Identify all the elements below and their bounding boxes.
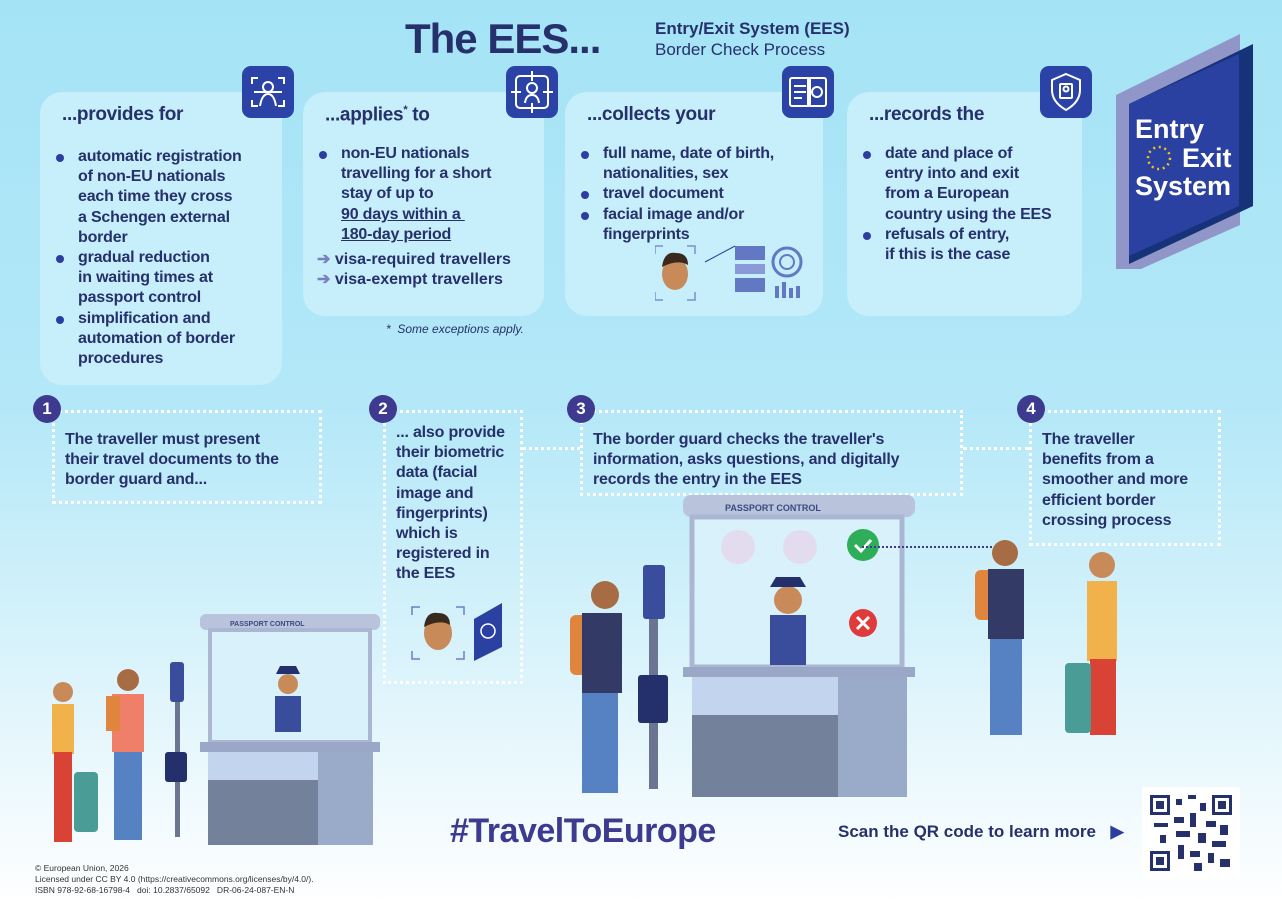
title: The EES... — [405, 15, 600, 62]
step 2: which is — [396, 525, 458, 542]
panel: collects your — [565, 92, 823, 316]
panel: records the: entry into and exit — [885, 165, 1019, 182]
step 1: their travel documents to the — [65, 451, 279, 468]
panel: provides for: gradual reduction — [78, 249, 210, 266]
icon: shield — [1040, 66, 1092, 118]
panel: collects your: full name, date of birth, — [603, 145, 774, 162]
illustration: face and data — [655, 245, 802, 301]
logo: Entry Exit System: Exit — [1182, 143, 1232, 173]
dotted connector to step 4 — [862, 546, 992, 548]
step 3 — [580, 410, 963, 496]
panel: provides for: simplification and — [78, 310, 210, 327]
panel: applies to: stay of up to — [341, 185, 434, 202]
panel: applies to: travelling for a short — [341, 165, 491, 182]
number 4 — [1017, 395, 1045, 423]
subtitle: Entry/Exit System (EES) — [655, 19, 850, 38]
panel: provides for: of non-EU nationals — [78, 168, 225, 185]
panel: records the: refusals of entry, — [885, 226, 1009, 243]
panel: applies to — [303, 92, 544, 316]
panel: records the: if this is the case — [885, 246, 1010, 263]
illustration: booth 3 with guard and traveller: PASSPORT CONTROL — [725, 503, 821, 513]
step 4: The traveller — [1042, 431, 1135, 448]
panel: applies to: ...applies* to — [325, 104, 430, 125]
panel: records the: ...records the — [869, 104, 984, 125]
number 4: 4 — [1026, 399, 1036, 418]
step 1 — [52, 410, 322, 504]
panel: provides for: automation of border — [78, 330, 235, 347]
step 2: data (facial — [396, 464, 477, 481]
copyright text: ISBN 978-92-68-16798-4 doi: 10.2837/65092 DR-06-24-087-EN-N — [35, 885, 294, 895]
logo: Entry Exit System: Entry — [1135, 114, 1204, 144]
panel: provides for: each time they cross — [78, 188, 232, 205]
hashtag: #TravelToEurope — [450, 812, 716, 850]
panel: collects your: fingerprints — [603, 226, 690, 243]
panel: records the — [847, 92, 1082, 316]
panel: provides for: a Schengen external — [78, 209, 230, 226]
number 2: 2 — [378, 399, 388, 418]
connector dots — [523, 447, 580, 450]
panel: applies to: 90 days within a — [341, 206, 461, 223]
step 2: ... also provide — [396, 424, 505, 441]
panel: collects your: nationalities, sex — [603, 165, 728, 182]
panel: records the: from a European — [885, 185, 1009, 202]
step 4: benefits from a — [1042, 451, 1154, 468]
panel: applies to: ➔ visa-required travellers — [317, 251, 511, 268]
step 4 — [1029, 410, 1221, 546]
panel: collects your: ...collects your — [587, 104, 715, 125]
panel: provides for: border — [78, 229, 127, 246]
number 3 — [567, 395, 595, 423]
illustration: booth 3 with guard and traveller — [570, 495, 915, 797]
number 1: 1 — [42, 399, 52, 418]
panel: applies to: non-EU nationals — [341, 145, 469, 162]
copyright text: © European Union, 2026 — [35, 863, 129, 873]
number 1 — [33, 395, 61, 423]
illustration: booth 1 with travellers — [52, 614, 380, 845]
QR call to action: Scan the QR code to learn more ▶ — [838, 822, 1124, 841]
QR code — [1142, 787, 1240, 879]
number 3: 3 — [576, 399, 586, 418]
step 3: The border guard checks the traveller's — [593, 431, 884, 448]
step 3: information, asks questions, and digitally — [593, 451, 899, 468]
step 2: their biometric — [396, 444, 504, 461]
icon: biometric face — [411, 603, 502, 661]
step 3: records the entry in the EES — [593, 471, 802, 488]
step 4: efficient border — [1042, 492, 1155, 509]
step 4: smoother and more — [1042, 471, 1188, 488]
step 1: The traveller must present — [65, 431, 260, 448]
panel: provides for: automatic registration — [78, 148, 242, 165]
panel: collects your: travel document — [603, 185, 724, 202]
illustration: happy travellers — [975, 540, 1117, 735]
subtitle: Border Check Process — [655, 40, 825, 59]
copyright text — [35, 863, 314, 895]
footnote: * Some exceptions apply. — [386, 322, 524, 336]
illustration: booth 1 with travellers: PASSPORT CONTROL — [230, 621, 305, 628]
panel: provides for: procedures — [78, 350, 163, 367]
step 2: the EES — [396, 565, 455, 582]
panel: records the: country using the EES — [885, 206, 1052, 223]
panel: provides for: passport control — [78, 289, 201, 306]
number 2 — [369, 395, 397, 423]
copyright text: Licensed under CC BY 4.0 (https://creativecommons.org/licenses/by/4.0/). — [35, 874, 314, 884]
step 4: crossing process — [1042, 512, 1171, 529]
icon: face scan — [242, 66, 294, 118]
step 2: registered in — [396, 545, 489, 562]
panel: provides for: in waiting times at — [78, 269, 213, 286]
step 2: image and — [396, 485, 473, 502]
logo: Entry Exit System: System — [1135, 171, 1231, 201]
step 2 — [383, 410, 523, 684]
logo: Entry Exit System — [1116, 34, 1253, 269]
panel: records the: date and place of — [885, 145, 1012, 162]
icon: document fingerprint — [782, 66, 834, 118]
step 2: fingerprints) — [396, 505, 488, 522]
panel: provides for: ...provides for — [62, 104, 183, 125]
panel: applies to: ➔ visa-exempt travellers — [317, 271, 503, 288]
icon: portrait scan — [506, 66, 558, 118]
panel: applies to: 180-day period — [341, 226, 451, 243]
panel: collects your: facial image and/or — [603, 206, 744, 223]
subtitle — [655, 19, 850, 59]
step 1: border guard and... — [65, 471, 207, 488]
panel: provides for — [40, 92, 282, 385]
